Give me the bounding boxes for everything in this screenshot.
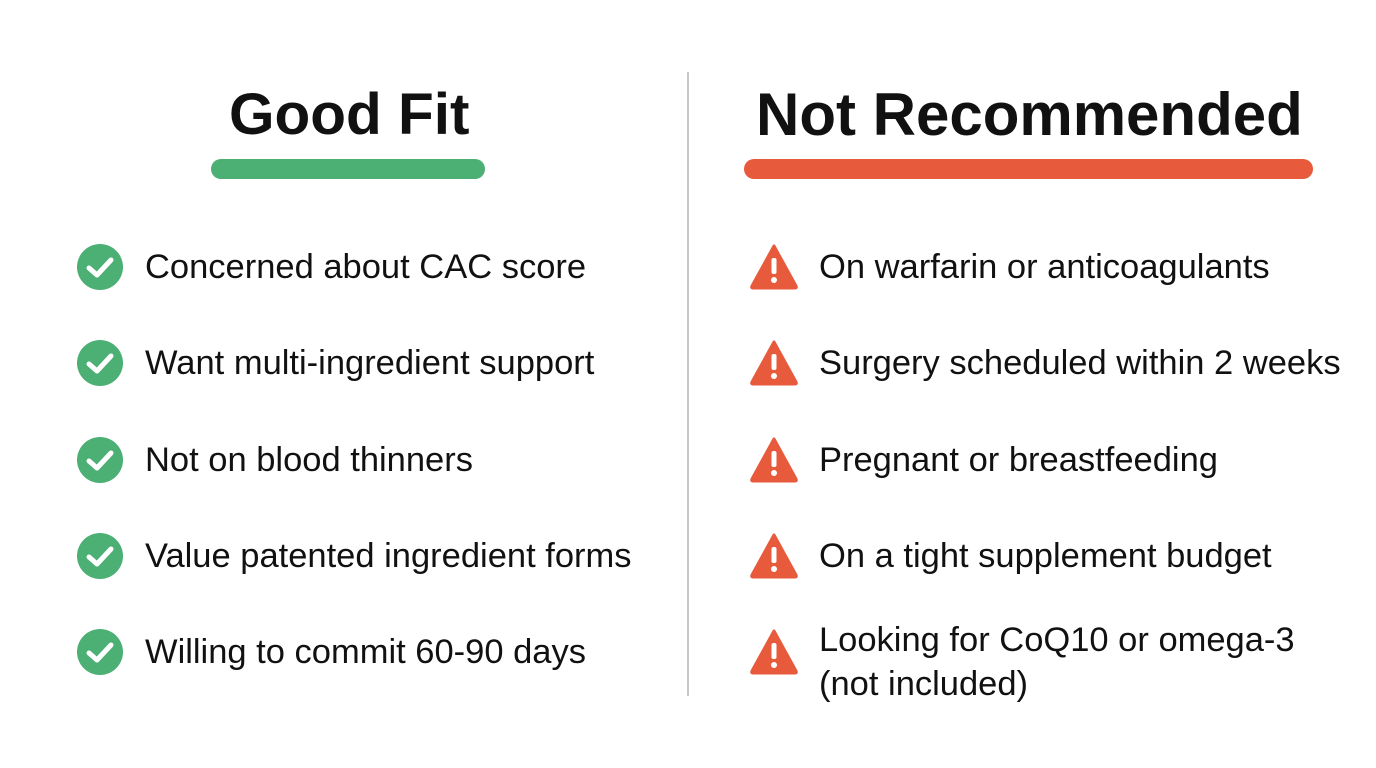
warning item 3: Pregnant or breastfeeding (819, 441, 1218, 479)
divider (687, 72, 689, 696)
warning item 1: On warfarin or anticoagulants (819, 248, 1270, 286)
item 3 (77, 437, 473, 483)
warning item 5: Looking for CoQ10 or omega-3 (819, 621, 1295, 659)
item 3: Not on blood thinners (145, 441, 473, 479)
item 1: Concerned about CAC score (145, 248, 586, 286)
warning item 5 (750, 621, 1295, 703)
green underline (211, 159, 485, 179)
item 4: Value patented ingredient forms (145, 537, 632, 575)
warning item 5: (not included) (819, 665, 1028, 703)
warning item 4: On a tight supplement budget (819, 537, 1272, 575)
heading: Not Recommended: Not Recommended (756, 81, 1303, 148)
panel: good fit (77, 82, 632, 675)
heading: Good Fit: Good Fit (229, 82, 469, 147)
red underline (744, 159, 1313, 179)
item 2: Want multi-ingredient support (145, 344, 594, 382)
warning item 2: Surgery scheduled within 2 weeks (819, 344, 1341, 382)
panel: not recommended (744, 81, 1341, 703)
item 5: Willing to commit 60-90 days (145, 633, 586, 671)
